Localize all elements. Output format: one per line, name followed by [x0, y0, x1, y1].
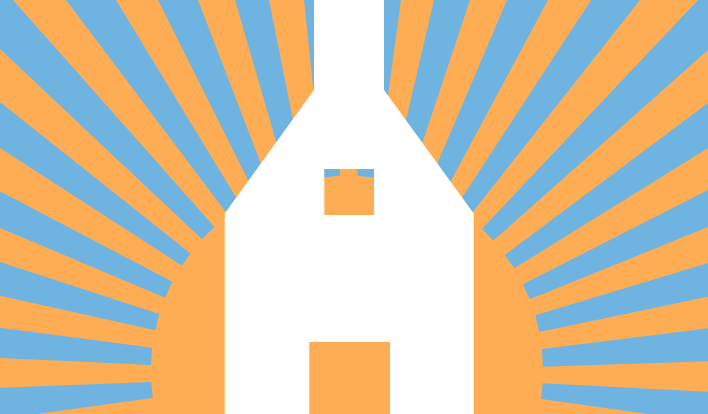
- left rays: [0, 0, 316, 414]
- window pane: [324, 169, 374, 215]
- window: [324, 169, 374, 215]
- door: [309, 342, 390, 414]
- window right notch: [357, 169, 374, 178]
- house silhouette with chimney: [225, 0, 474, 414]
- right rays: [382, 0, 708, 414]
- window left notch: [324, 169, 340, 177]
